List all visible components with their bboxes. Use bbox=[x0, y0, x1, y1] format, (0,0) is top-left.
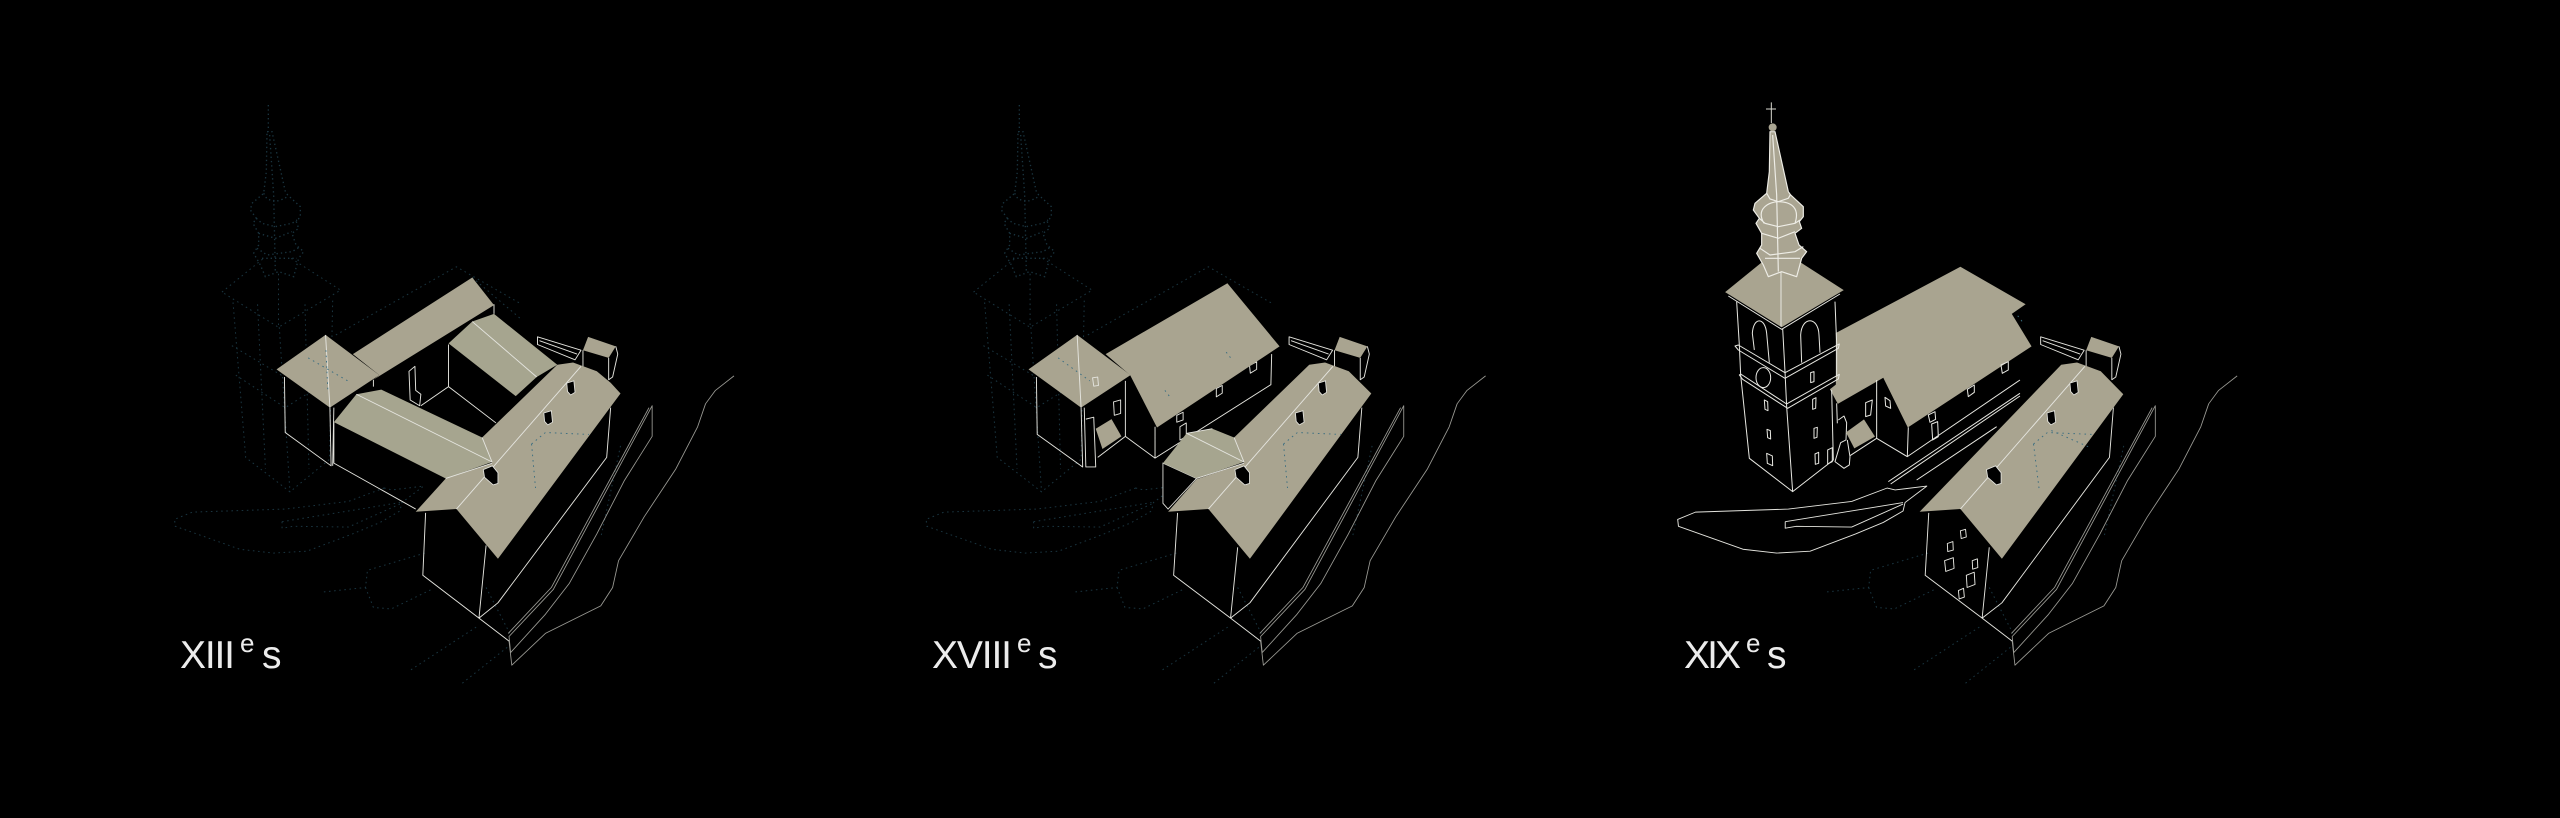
roof: church bbox=[1106, 283, 1280, 428]
annex building bbox=[537, 337, 618, 380]
blue traces on roofs bbox=[1058, 352, 1341, 488]
roof ridges and main building walls bbox=[1077, 335, 1362, 641]
panel: XIXe siècle bbox=[1678, 102, 2237, 683]
ridge and main building walls bbox=[1925, 366, 2113, 641]
path towards river bbox=[1888, 393, 2020, 484]
label: XIIIe s: s bbox=[262, 634, 282, 677]
blue traces on roofs bbox=[308, 350, 589, 488]
ghost: future bell tower bbox=[222, 258, 341, 492]
label: XVIIIe s: XVIII bbox=[932, 634, 1012, 677]
stair turret bbox=[1835, 416, 1850, 468]
site group bbox=[1678, 258, 2237, 683]
chimneys bbox=[483, 381, 575, 485]
ghost: shadows bbox=[1825, 446, 2124, 683]
roof: church nave bbox=[1830, 267, 2032, 428]
annex building bbox=[1289, 337, 1369, 380]
chimneys bbox=[1986, 381, 2078, 485]
main building bbox=[1920, 316, 2123, 641]
chimneys bbox=[1235, 381, 1327, 485]
tower windows bbox=[1764, 372, 1832, 466]
panel: XVIIIe siècle bbox=[926, 105, 1486, 683]
roof ridges and main building walls bbox=[326, 322, 611, 641]
bell tower and church line work bbox=[1728, 237, 2020, 492]
river outline bbox=[1678, 486, 1927, 553]
panel: XIIIe siècle bbox=[175, 105, 734, 683]
label: XIXe s: e bbox=[1746, 628, 1760, 658]
walls of tower and church bbox=[1036, 354, 1272, 467]
walls of the cloister bbox=[284, 304, 496, 509]
roof: south wing bbox=[334, 390, 492, 478]
roof: tower bbox=[277, 335, 379, 408]
ghost: river and shadows bbox=[926, 267, 1372, 683]
ghost: future bell tower bbox=[974, 258, 1092, 492]
roof: main building bbox=[1920, 362, 2123, 559]
spire ball bbox=[1769, 123, 1777, 131]
label: XIIIe s: e bbox=[240, 628, 254, 658]
belfry windows bbox=[1752, 321, 1820, 363]
roof: chapel bbox=[1163, 429, 1244, 478]
lantern rings bbox=[1759, 135, 1803, 272]
roof: north wing bbox=[353, 278, 494, 380]
label: XVIIIe s: e bbox=[1017, 628, 1031, 658]
terrain lines bbox=[508, 376, 734, 665]
church walls and windows bbox=[1837, 362, 2020, 457]
terrain lines bbox=[1260, 376, 1486, 665]
label: XVIIIe s: s bbox=[1038, 634, 1058, 677]
terrain lines bbox=[2011, 376, 2237, 665]
ghost: future lantern bbox=[250, 105, 304, 277]
building group bbox=[175, 258, 734, 683]
cornice bands bbox=[1735, 344, 1839, 408]
ghost: future lantern bbox=[1001, 105, 1055, 277]
lantern and spire bbox=[1753, 102, 1807, 277]
roof: porch bbox=[1096, 419, 1121, 449]
chapel walls bbox=[1163, 463, 1197, 509]
blue traces on roof bbox=[2018, 316, 2093, 492]
roof: bell tower bbox=[1725, 258, 1844, 327]
roof: main building bbox=[1168, 362, 1371, 559]
porch roof bbox=[1846, 419, 1875, 448]
label: XIIIe s: XIII bbox=[180, 634, 235, 677]
lantern body bbox=[1753, 132, 1807, 277]
roof: tower bbox=[1029, 335, 1131, 408]
ghost: river and shadows bbox=[175, 267, 621, 683]
roof: main building bbox=[416, 362, 621, 559]
label: XIXe s: XIX bbox=[1684, 634, 1741, 677]
label: XIXe s: s bbox=[1767, 634, 1786, 677]
roof: east wing bbox=[449, 314, 557, 396]
cross bbox=[1766, 102, 1776, 123]
clock bbox=[1756, 368, 1771, 388]
building group bbox=[926, 258, 1486, 683]
tower walls bbox=[1728, 237, 1840, 492]
annex building bbox=[2041, 337, 2121, 380]
